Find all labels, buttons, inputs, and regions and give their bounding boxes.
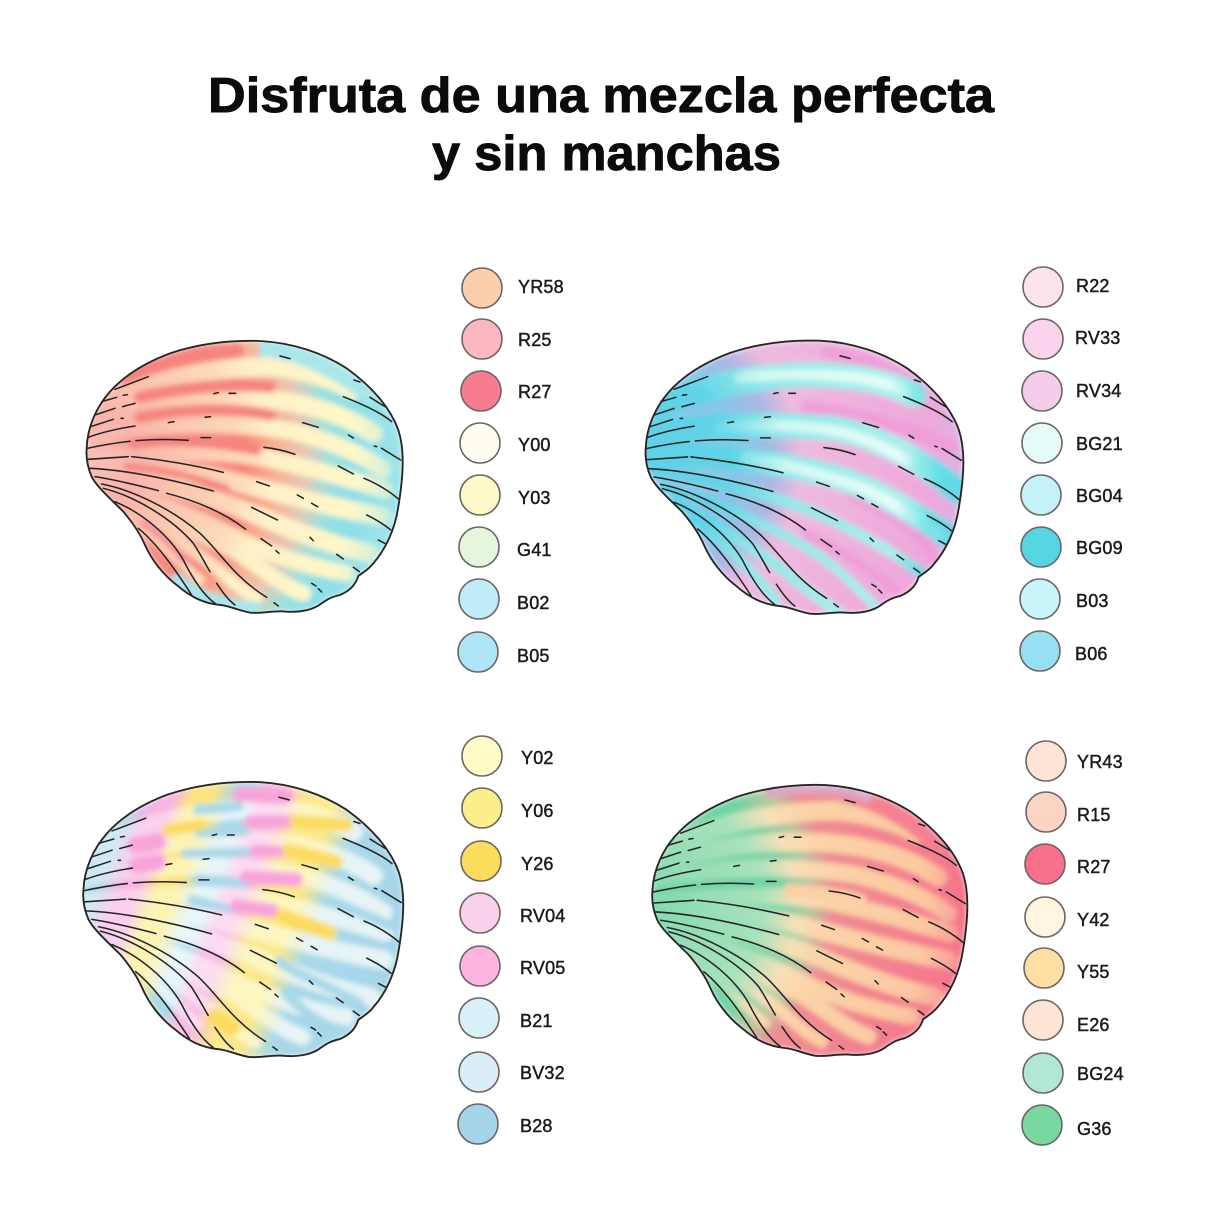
swatch: YR43 bbox=[1026, 741, 1123, 781]
shell illustration: coral to turquoise bbox=[87, 341, 403, 613]
swatch: E26: E26 bbox=[1077, 1015, 1110, 1035]
swatch: B05 bbox=[458, 632, 550, 672]
swatch: B05: B05 bbox=[517, 646, 550, 666]
swatch: RV05 bbox=[460, 946, 566, 986]
swatch: BG21: BG21 bbox=[1076, 434, 1123, 454]
swatch: Y00: Y00 bbox=[518, 435, 551, 455]
swatch: Y06: Y06 bbox=[521, 801, 554, 821]
swatch: BG24 bbox=[1023, 1053, 1124, 1093]
swatch: Y26 bbox=[461, 841, 554, 881]
swatch: Y00 bbox=[460, 423, 551, 463]
title bbox=[208, 69, 995, 181]
swatch: Y42 bbox=[1025, 897, 1110, 937]
swatch: BG09 bbox=[1021, 527, 1123, 567]
swatch: Y03: Y03 bbox=[518, 488, 551, 508]
swatch: B02 bbox=[459, 579, 550, 619]
swatch: BG09: BG09 bbox=[1076, 538, 1123, 558]
swatch: B03 bbox=[1020, 579, 1109, 619]
swatch: E26 bbox=[1023, 1000, 1110, 1040]
swatch: B06: B06 bbox=[1075, 644, 1108, 664]
swatch: RV34 bbox=[1022, 371, 1122, 411]
swatch: BV32: BV32 bbox=[520, 1063, 565, 1083]
panel: green, peach and red shell bbox=[652, 741, 1124, 1145]
panel: red, yellow and blue shell bbox=[87, 268, 564, 672]
panel: yellow, pink and blue shell bbox=[83, 736, 566, 1144]
swatch: B28 bbox=[458, 1104, 553, 1144]
swatch: R15 bbox=[1026, 792, 1111, 832]
swatch: B28: B28 bbox=[520, 1116, 553, 1136]
swatch: RV34: RV34 bbox=[1076, 381, 1122, 401]
swatch: R27: R27 bbox=[1077, 857, 1111, 877]
swatch: Y02: Y02 bbox=[521, 748, 554, 768]
swatch: BG24: BG24 bbox=[1077, 1064, 1124, 1084]
title: y sin manchas bbox=[432, 127, 781, 181]
swatch: Y55 bbox=[1024, 948, 1110, 988]
panel: pink and cyan shell bbox=[646, 267, 1123, 671]
swatch: YR58: YR58 bbox=[518, 277, 564, 297]
swatch: Y06 bbox=[462, 788, 554, 828]
swatch: Y26: Y26 bbox=[521, 854, 554, 874]
swatch: Y55: Y55 bbox=[1077, 962, 1110, 982]
swatch: RV04: RV04 bbox=[520, 906, 566, 926]
swatch: R22 bbox=[1023, 267, 1110, 307]
swatch: Y02 bbox=[462, 736, 554, 776]
swatch: R22: R22 bbox=[1076, 276, 1110, 296]
shell illustration: pink and cyan bbox=[646, 341, 963, 614]
swatch: R27: R27 bbox=[518, 382, 552, 402]
swatch: B21 bbox=[459, 998, 553, 1038]
swatch: R27 bbox=[461, 371, 552, 411]
swatch: B03: B03 bbox=[1076, 591, 1109, 611]
shell illustration: green, peach and red bbox=[652, 785, 967, 1056]
swatch: R27 bbox=[1025, 844, 1111, 884]
swatch: B21: B21 bbox=[520, 1011, 553, 1031]
shell illustration: yellow, pink and blue bbox=[83, 782, 403, 1057]
swatch: BG21 bbox=[1022, 423, 1123, 463]
swatch: BV32 bbox=[459, 1052, 565, 1092]
swatch: BG04 bbox=[1021, 475, 1123, 515]
swatch: Y03 bbox=[460, 475, 551, 515]
title: Disfruta de una mezcla perfecta bbox=[208, 69, 995, 123]
swatch: YR58 bbox=[462, 268, 564, 308]
swatch: RV05: RV05 bbox=[520, 958, 566, 978]
swatch: BG04: BG04 bbox=[1076, 486, 1123, 506]
swatch: B02: B02 bbox=[517, 593, 550, 613]
swatch: Y42: Y42 bbox=[1077, 910, 1110, 930]
swatch: RV33: RV33 bbox=[1075, 328, 1121, 348]
swatch: R15: R15 bbox=[1077, 805, 1111, 825]
swatch: G36: G36 bbox=[1077, 1119, 1112, 1139]
swatch: B06 bbox=[1020, 631, 1108, 671]
swatch: G36 bbox=[1022, 1105, 1112, 1145]
swatch: RV04 bbox=[460, 893, 566, 933]
swatch: R25: R25 bbox=[518, 330, 552, 350]
swatch: R25 bbox=[462, 319, 552, 359]
swatch: RV33 bbox=[1023, 319, 1121, 359]
swatch: YR43: YR43 bbox=[1077, 752, 1123, 772]
swatch: G41 bbox=[459, 527, 552, 567]
swatch: G41: G41 bbox=[517, 540, 552, 560]
